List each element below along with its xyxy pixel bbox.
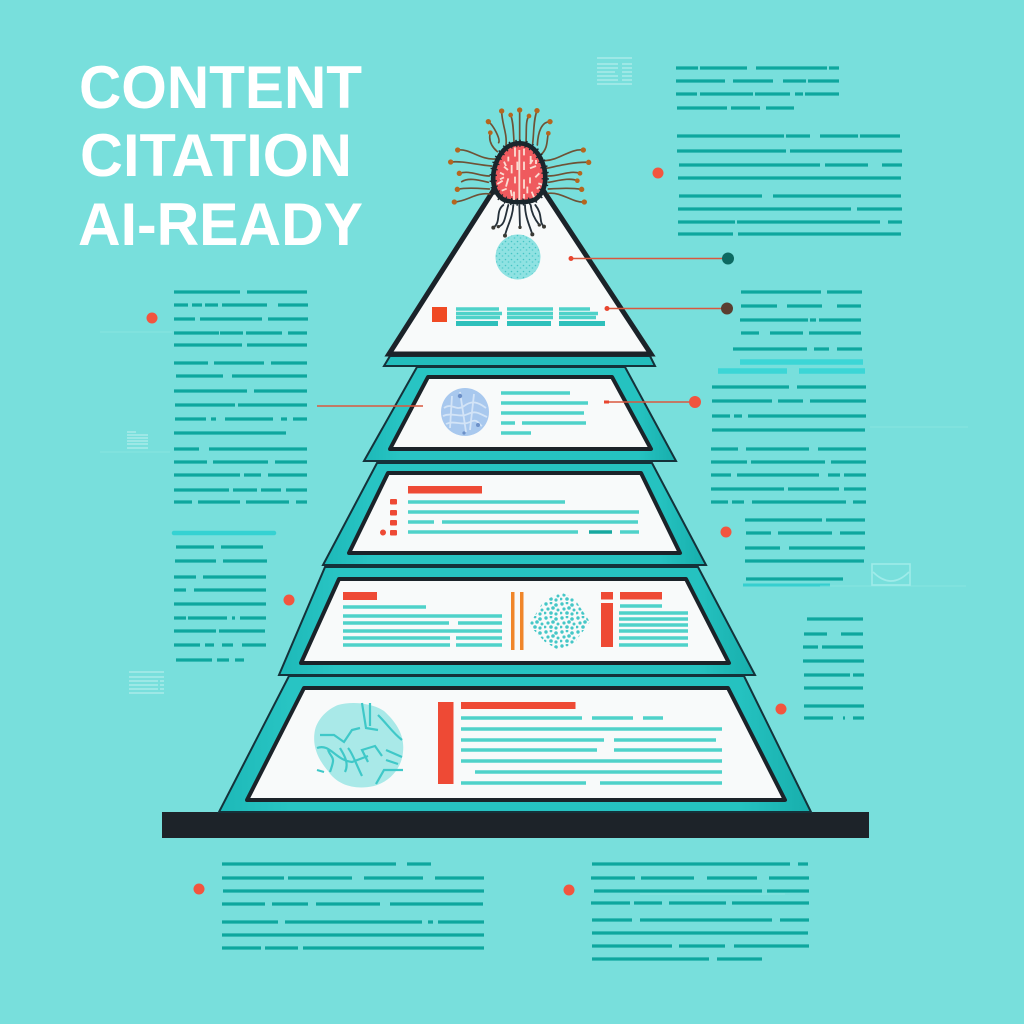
icon: circuit blob bbox=[314, 703, 403, 787]
text lines bbox=[408, 502, 639, 532]
red heading bar bbox=[343, 592, 377, 600]
icon: dot cluster bbox=[529, 592, 590, 651]
icon: small data table top bbox=[597, 58, 632, 84]
text block: bottom right bbox=[591, 864, 809, 959]
text block: right lower bbox=[743, 520, 865, 585]
pyramid tier 4 bbox=[279, 567, 755, 675]
pyramid tier 2 bbox=[364, 367, 676, 461]
pyramid tier 5 bbox=[219, 676, 811, 812]
base bar bbox=[162, 812, 869, 838]
red list markers bbox=[380, 499, 397, 536]
text block: left upper bbox=[174, 292, 308, 502]
text lines bbox=[456, 309, 605, 324]
red side bar bbox=[438, 702, 454, 784]
icon: small data table left bbox=[127, 432, 148, 448]
connector: top triangle circle bbox=[568, 252, 734, 264]
icon: AI brain with circuit wires bbox=[448, 107, 591, 238]
text lines bbox=[619, 606, 688, 645]
icon: dotted teal circle bbox=[496, 234, 540, 280]
text lines bbox=[343, 607, 502, 645]
text lines bbox=[501, 393, 588, 433]
title bbox=[78, 54, 363, 258]
red heading bar bbox=[461, 702, 576, 709]
title: CITATION bbox=[80, 122, 352, 189]
red marker dots bbox=[146, 168, 786, 896]
red blocks bbox=[601, 592, 662, 647]
text block: far right bbox=[803, 619, 864, 718]
connector: tier 2 left bbox=[317, 405, 423, 407]
text block: left lower bbox=[174, 533, 274, 660]
connector: top triangle text bbox=[604, 302, 733, 314]
text block: right upper bbox=[718, 292, 865, 371]
text block: top right second paragraph bbox=[677, 136, 902, 234]
text block: right middle bbox=[711, 387, 866, 502]
text lines bbox=[461, 718, 722, 783]
icon: envelope bbox=[872, 564, 910, 585]
icon: blue data circle bbox=[441, 388, 489, 436]
red square bbox=[432, 307, 447, 322]
icon: small data table lower left bbox=[129, 672, 164, 693]
pyramid tier 3 bbox=[323, 463, 706, 565]
pyramid top triangle bbox=[389, 152, 651, 354]
title: CONTENT bbox=[79, 54, 362, 121]
orange bars bbox=[511, 592, 524, 650]
connector band under top tier bbox=[384, 356, 655, 366]
red heading bar bbox=[408, 486, 482, 494]
text block: bottom left bbox=[222, 864, 484, 948]
text block: top right first paragraph bbox=[676, 68, 839, 108]
connector: tier 2 right bbox=[604, 396, 701, 408]
title: AI-READY bbox=[78, 191, 363, 258]
